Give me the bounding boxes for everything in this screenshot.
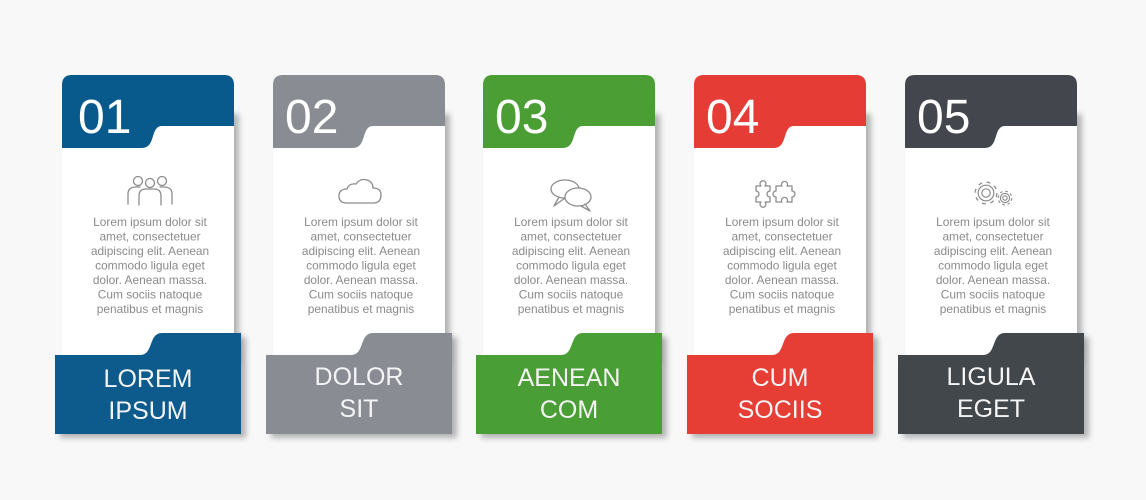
card 02 bbox=[266, 75, 452, 434]
body text: Lorem ipsum dolor sit bbox=[93, 215, 208, 229]
bottom label block bbox=[55, 333, 241, 434]
icon: gears bbox=[977, 184, 1011, 204]
body text: Cum sociis natoque bbox=[98, 288, 203, 302]
icon: speech bubbles bbox=[551, 180, 591, 211]
icon: cloud bbox=[339, 180, 381, 203]
title: LOREM bbox=[104, 365, 192, 393]
white body bbox=[905, 110, 1077, 360]
number 02: 02 bbox=[285, 91, 338, 144]
white body bbox=[694, 110, 866, 360]
body text: dolor. Aenean massa. bbox=[936, 273, 1050, 287]
body text: Lorem ipsum dolor sit bbox=[936, 215, 1051, 229]
bottom label block bbox=[476, 333, 662, 434]
body text: penatibus et magnis bbox=[940, 302, 1046, 316]
body text: penatibus et magnis bbox=[308, 302, 414, 316]
body text: dolor. Aenean massa. bbox=[514, 273, 628, 287]
body text: Lorem ipsum dolor sit bbox=[725, 215, 840, 229]
body text: Cum sociis natoque bbox=[730, 288, 835, 302]
white body bbox=[62, 110, 234, 360]
title: EGET bbox=[957, 395, 1025, 423]
card 05 bbox=[898, 75, 1084, 434]
body text: Cum sociis natoque bbox=[309, 288, 414, 302]
header tab 03 bbox=[483, 75, 655, 148]
body text: amet, consectetuer bbox=[942, 230, 1044, 244]
body text: amet, consectetuer bbox=[520, 230, 622, 244]
title: IPSUM bbox=[108, 397, 188, 425]
body text: dolor. Aenean massa. bbox=[93, 273, 207, 287]
title: LIGULA bbox=[947, 363, 1036, 391]
white body bbox=[273, 110, 445, 360]
header tab 05 bbox=[905, 75, 1077, 148]
card 03 bbox=[476, 75, 662, 434]
body text: adipiscing elit. Aenean bbox=[934, 244, 1052, 258]
body text: commodo ligula eget bbox=[727, 258, 838, 272]
body text: adipiscing elit. Aenean bbox=[512, 244, 630, 258]
body text: penatibus et magnis bbox=[518, 302, 624, 316]
body text: dolor. Aenean massa. bbox=[725, 273, 839, 287]
body text: dolor. Aenean massa. bbox=[304, 273, 418, 287]
body text: penatibus et magnis bbox=[729, 302, 835, 316]
number 01: 01 bbox=[78, 91, 131, 144]
card 04 bbox=[687, 75, 873, 434]
bottom label block bbox=[266, 333, 452, 434]
body text: adipiscing elit. Aenean bbox=[302, 244, 420, 258]
body text: commodo ligula eget bbox=[516, 258, 627, 272]
body text: penatibus et magnis bbox=[97, 302, 203, 316]
body text: amet, consectetuer bbox=[99, 230, 201, 244]
header tab 02 bbox=[273, 75, 445, 148]
title: SOCIIS bbox=[738, 396, 822, 424]
body text: amet, consectetuer bbox=[731, 230, 833, 244]
body text: amet, consectetuer bbox=[310, 230, 412, 244]
card 01 bbox=[55, 75, 241, 434]
number 03: 03 bbox=[495, 91, 548, 144]
bottom label block bbox=[687, 333, 873, 434]
header tab 01 bbox=[62, 75, 234, 148]
body text: commodo ligula eget bbox=[938, 258, 1049, 272]
title: DOLOR bbox=[315, 363, 403, 391]
body text: Lorem ipsum dolor sit bbox=[304, 215, 419, 229]
bottom label block bbox=[898, 333, 1084, 434]
white body bbox=[483, 110, 655, 360]
title: AENEAN bbox=[518, 364, 620, 392]
body text: adipiscing elit. Aenean bbox=[91, 244, 209, 258]
body text: Cum sociis natoque bbox=[519, 288, 624, 302]
body text: Lorem ipsum dolor sit bbox=[514, 215, 629, 229]
number 04: 04 bbox=[706, 91, 759, 144]
title: COM bbox=[540, 396, 598, 424]
number 05: 05 bbox=[917, 91, 970, 144]
title: CUM bbox=[752, 364, 808, 392]
icon: people bbox=[128, 176, 172, 205]
header tab 04 bbox=[694, 75, 866, 148]
body text: commodo ligula eget bbox=[306, 258, 417, 272]
icon: puzzle bbox=[756, 181, 795, 207]
body text: Cum sociis natoque bbox=[941, 288, 1046, 302]
title: SIT bbox=[340, 395, 378, 423]
body text: commodo ligula eget bbox=[95, 258, 206, 272]
body text: adipiscing elit. Aenean bbox=[723, 244, 841, 258]
